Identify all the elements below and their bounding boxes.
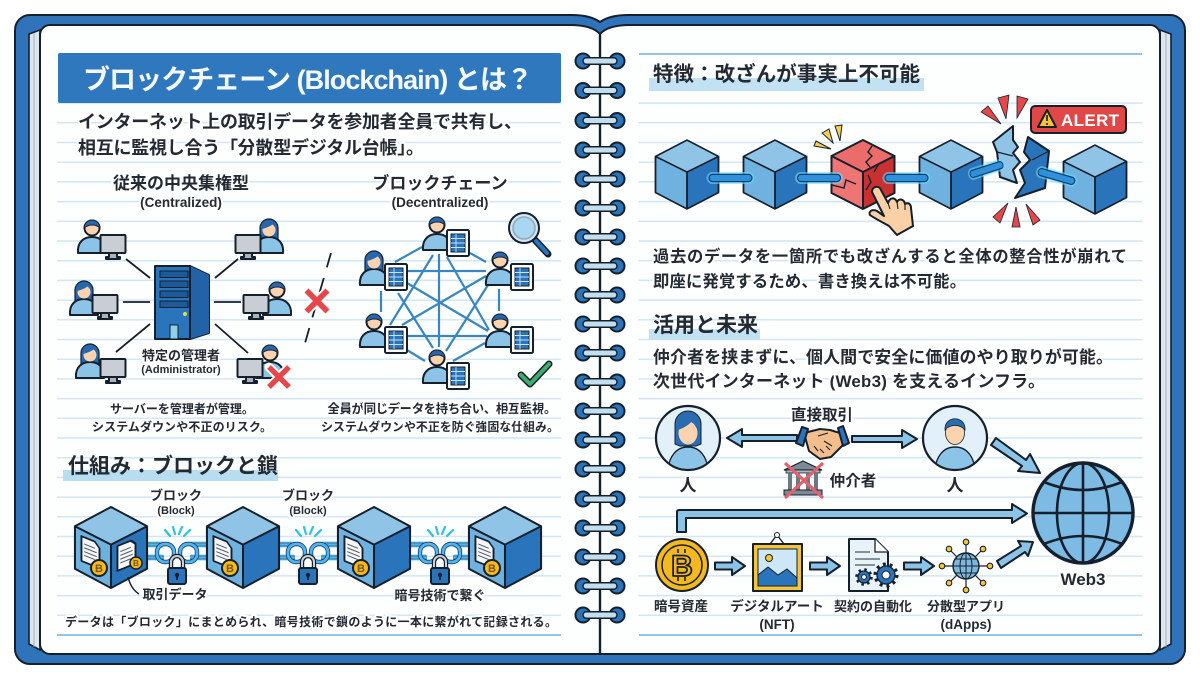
heading: use and future: 活用と未来	[653, 314, 758, 337]
label: block: (Block)	[157, 505, 195, 517]
icon: red alert rays	[981, 95, 1040, 227]
cube	[656, 140, 718, 209]
heading: centralized	[113, 173, 249, 210]
icon: client top right	[236, 219, 283, 259]
label: transaction data: 取引データ	[142, 587, 208, 602]
text: blockchain description: システムダウンや不正を防ぐ強固な仕組み。	[321, 419, 559, 434]
intro text: 相互に監視し合う「分散型デジタル台帳」。	[78, 137, 424, 158]
icon: framed art	[753, 532, 802, 591]
cube	[744, 140, 806, 209]
block 1	[75, 507, 147, 588]
text: centralized description: サーバーを管理者が管理。	[110, 401, 254, 416]
arrow: long elbow to web3	[677, 504, 1027, 532]
text: use explanation: 仲介者を挟まずに、個人間で安全に価値のやり取りが可能。	[653, 347, 1113, 367]
text: blockchain description: 全員が同じデータを持ち合い、相互監視。	[328, 401, 556, 416]
title banner	[58, 53, 561, 103]
icon: green check	[521, 364, 549, 384]
label: digital art: デジタルアート	[730, 598, 824, 614]
icon: client top left	[78, 220, 126, 259]
block 3	[338, 507, 410, 588]
label: cryptographic link: 暗号技術で繋ぐ	[394, 588, 486, 603]
text: blockchain description	[321, 401, 559, 434]
text: centralized description: システムダウンや不正のリスク。	[92, 419, 272, 434]
label: block	[282, 488, 334, 517]
icon: broken cube	[993, 126, 1049, 198]
node lower right	[486, 314, 533, 353]
icon: pointing hand	[870, 187, 913, 235]
label: digital art	[730, 598, 824, 632]
text: centralized description	[92, 401, 272, 434]
text: tamper explanation: 即座に発覚するため、書き換えは不可能。	[653, 272, 966, 291]
heading: mechanism: 仕組み：ブロックと鎖	[68, 454, 278, 478]
heading: centralized: 従来の中央集権型	[113, 173, 249, 193]
label: direct trade: 直接取引	[791, 405, 853, 424]
icon: client bottom left	[76, 344, 126, 383]
icon: client middle right	[244, 282, 291, 319]
chain links	[143, 527, 474, 584]
label: dapps: (dApps)	[940, 617, 992, 632]
panel: left page	[58, 53, 561, 629]
intro text	[78, 111, 522, 158]
text: tamper explanation	[653, 247, 1127, 291]
panel: right page	[649, 62, 1133, 632]
arrow	[997, 541, 1033, 568]
label: intermediary: 仲介者	[830, 472, 876, 490]
intro text: インターネット上の取引データを参加者全員で共有し、	[78, 111, 522, 132]
diagram: decentralized network	[360, 213, 549, 389]
divider with red cross	[303, 253, 331, 350]
icon: client middle left	[70, 281, 118, 319]
icon: client bottom right failed	[238, 345, 289, 387]
icon: person right	[923, 406, 987, 480]
label: dapps	[927, 599, 1005, 632]
diagram: block chain	[75, 488, 541, 603]
red tampered cube	[832, 140, 894, 209]
alert badge: ALERT	[1061, 111, 1120, 130]
icon: bitcoin coin: B	[671, 550, 693, 583]
text: use explanation: 次世代インターネット (Web3) を支えるインフラ。	[653, 371, 1045, 391]
arrow: right	[852, 430, 917, 448]
label: digital art: (NFT)	[759, 617, 795, 632]
arrow	[904, 557, 934, 575]
cube	[1064, 145, 1126, 214]
icon: crossed-out bank	[784, 461, 823, 498]
spiral binding rings	[576, 54, 624, 622]
node bottom	[423, 350, 469, 389]
diagram: tamper chain	[656, 95, 1126, 235]
label: block: ブロック	[150, 488, 202, 503]
node top	[423, 217, 469, 256]
text: tamper explanation: 過去のデータを一箇所でも改ざんすると全体の整合性が崩れて	[653, 247, 1127, 266]
label: administrator: (Administrator)	[141, 364, 221, 376]
diagram: centralized network	[70, 219, 291, 387]
label: block: ブロック	[282, 488, 334, 503]
cube	[920, 140, 982, 209]
label: contract automation: 契約の自動化	[834, 599, 912, 614]
diagram: web3 applications	[654, 463, 1133, 632]
node upper right	[486, 252, 533, 290]
heading: centralized: (Centralized)	[140, 195, 222, 210]
label: person: 人	[946, 476, 964, 495]
heading: feature: 特徴：改ざんが事実上不可能	[653, 62, 920, 86]
label: dapps: 分散型アプリ	[927, 599, 1005, 614]
label: web3: Web3	[1060, 570, 1106, 589]
icon: server	[155, 266, 209, 339]
diagram: direct transaction	[656, 405, 1040, 532]
title banner: ブロックチェーン (Blockchain) とは？	[83, 64, 533, 95]
icon: handshake	[796, 426, 849, 459]
icon: smart contract	[849, 539, 897, 591]
icon: web3 globe	[1033, 463, 1133, 563]
block 2	[207, 507, 279, 588]
arrow: left	[727, 429, 797, 447]
heading: blockchain	[372, 173, 508, 210]
label: transaction data	[128, 577, 208, 602]
arrow	[810, 557, 840, 575]
icon: yellow impact rays	[814, 125, 842, 149]
label: administrator: 特定の管理者	[142, 348, 220, 363]
chain bars	[706, 158, 1078, 188]
label: person: 人	[680, 476, 696, 495]
block 4	[469, 507, 541, 588]
icon: person left	[656, 406, 720, 480]
arrow: to web3	[991, 438, 1040, 473]
label: block: (Block)	[289, 505, 327, 517]
text: chain description: データは「ブロック」にまとめられ、暗号技術で鎖のように一本に繋がれて記録される。	[65, 614, 557, 629]
node upper left	[360, 251, 407, 290]
icon: bitcoin coin	[656, 539, 708, 591]
label: crypto asset: 暗号資産	[654, 598, 708, 614]
text: use explanation	[653, 347, 1113, 391]
heading: blockchain: (Decentralized)	[392, 195, 488, 210]
label: administrator	[141, 348, 221, 376]
node lower left	[360, 314, 407, 353]
label: block	[150, 488, 202, 517]
icon: dApps globe	[939, 539, 993, 593]
arrow	[715, 557, 745, 575]
icon: magnifier	[509, 213, 548, 254]
heading: blockchain: ブロックチェーン	[372, 173, 508, 193]
alert badge	[1031, 106, 1126, 133]
